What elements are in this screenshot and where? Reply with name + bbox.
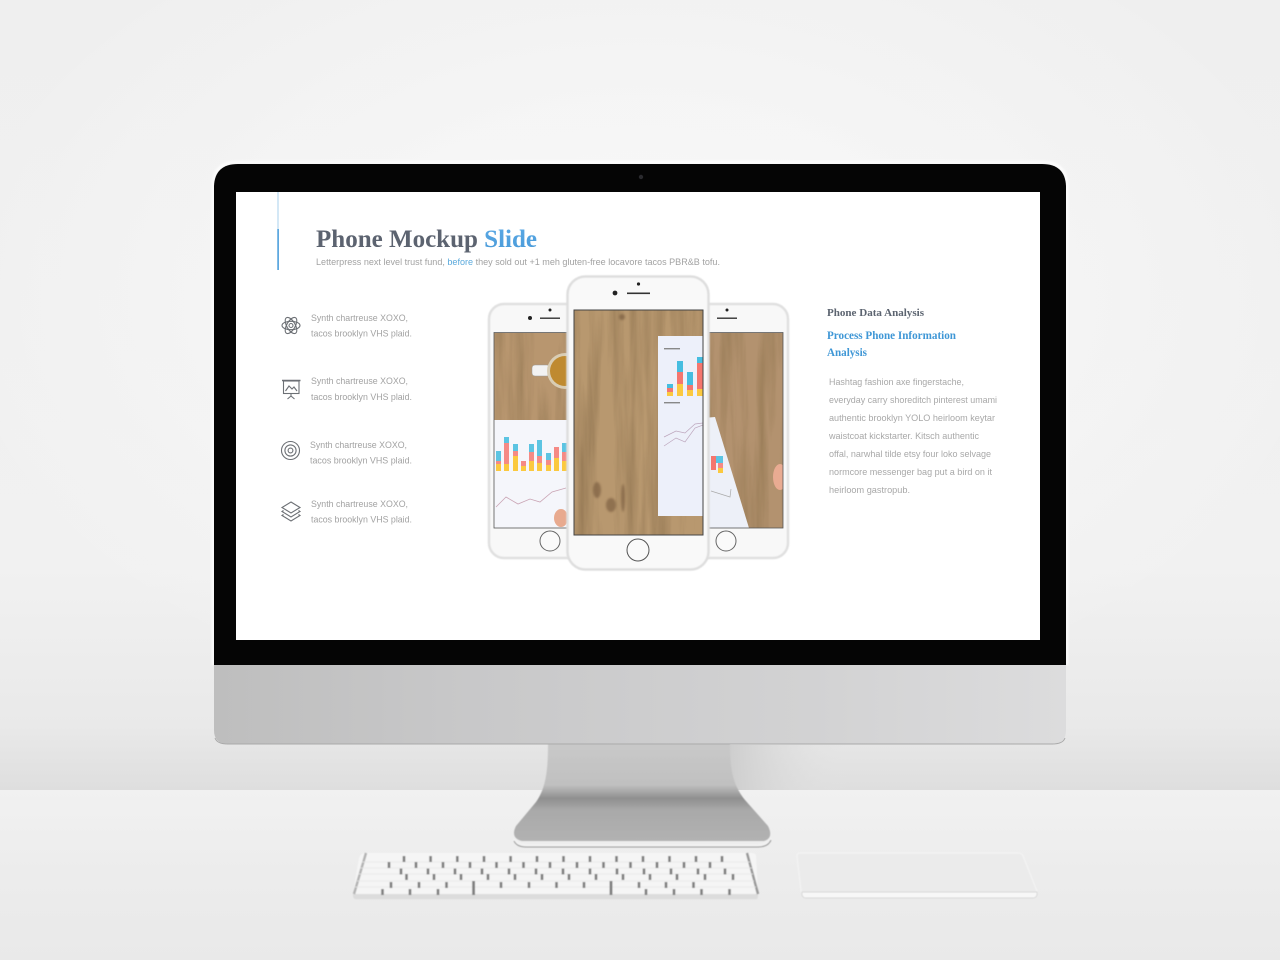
line chart [496,488,566,507]
paper [658,336,703,516]
right heading: Phone Data Analysis [827,307,925,319]
right subheading: Process Phone Information [827,330,957,342]
subtitle: Letterpress next level trust fund, before they sold out +1 meh gluten-free locavore tacos PBR&B tofu. [316,257,720,268]
accent rule [277,192,279,270]
key gaps [382,856,733,895]
feature text 3: Synth chartreuse XOXO, [310,440,407,451]
trackpad [797,853,1037,898]
feature text 3: tacos brooklyn VHS plaid. [310,456,412,466]
monitor stand [514,744,771,847]
feature text 1: Synth chartreuse XOXO, [311,313,408,324]
bar chart [667,357,703,396]
feature: layers [282,499,412,526]
hand [773,464,783,490]
monitor chin [214,665,1066,744]
feature text 2: tacos brooklyn VHS plaid. [311,392,412,403]
bar chart [496,437,567,471]
feature text 2: Synth chartreuse XOXO, [311,376,408,387]
desk surface [0,790,1280,960]
right paragraph: Hashtag fashion axe fingerstache, [829,377,964,388]
right subheading: Analysis [827,347,867,359]
feature: target [282,440,412,466]
phone: centre [568,276,708,570]
feature text 4: Synth chartreuse XOXO, [311,499,408,510]
infographic scene [0,160,1280,900]
feature text 1: tacos brooklyn VHS plaid. [311,328,412,340]
hand [554,509,568,527]
coffee cup [532,353,567,389]
camera [639,175,643,179]
right paragraph: heirloom gastropub. [829,485,910,496]
phone: left [488,302,568,560]
right paragraph: authentic brooklyn YOLO heirloom keytar [829,413,995,424]
paper subheading [664,402,680,403]
centre phone screen [574,310,703,535]
title: Phone Mockup Slide [316,224,537,253]
icon: presentation board [282,380,300,399]
feature text 4: tacos brooklyn VHS plaid. [311,514,412,526]
right column [827,307,1000,496]
right paragraph: offal, narwhal tilde etsy four loko selvage [829,449,991,460]
monitor bezel [214,164,1066,665]
wall shadow beside stand [728,745,848,790]
icon: layers [282,502,300,521]
icon: target [282,442,300,460]
right paragraph: waistcoat kickstarter. Kitsch authentic [828,431,979,442]
keyboard [353,853,758,899]
wood knots [593,314,625,512]
right paragraph: everyday carry shoreditch pinterest umami [829,395,997,406]
feature: atom [282,313,412,340]
monitor [213,162,1067,744]
left phone screen [494,333,568,527]
monitor halo [213,162,1067,665]
chart on paper [711,456,731,497]
paper [709,417,749,528]
feature: presentation [282,376,412,403]
screen [236,192,1040,640]
line chart [664,423,703,446]
feature list [282,313,412,526]
phone: right [708,302,790,560]
paper heading [664,348,680,349]
icon: atom [282,316,300,335]
right paragraph: normcore messenger bag put a bird on it [829,467,992,478]
right phone screen [709,333,783,528]
